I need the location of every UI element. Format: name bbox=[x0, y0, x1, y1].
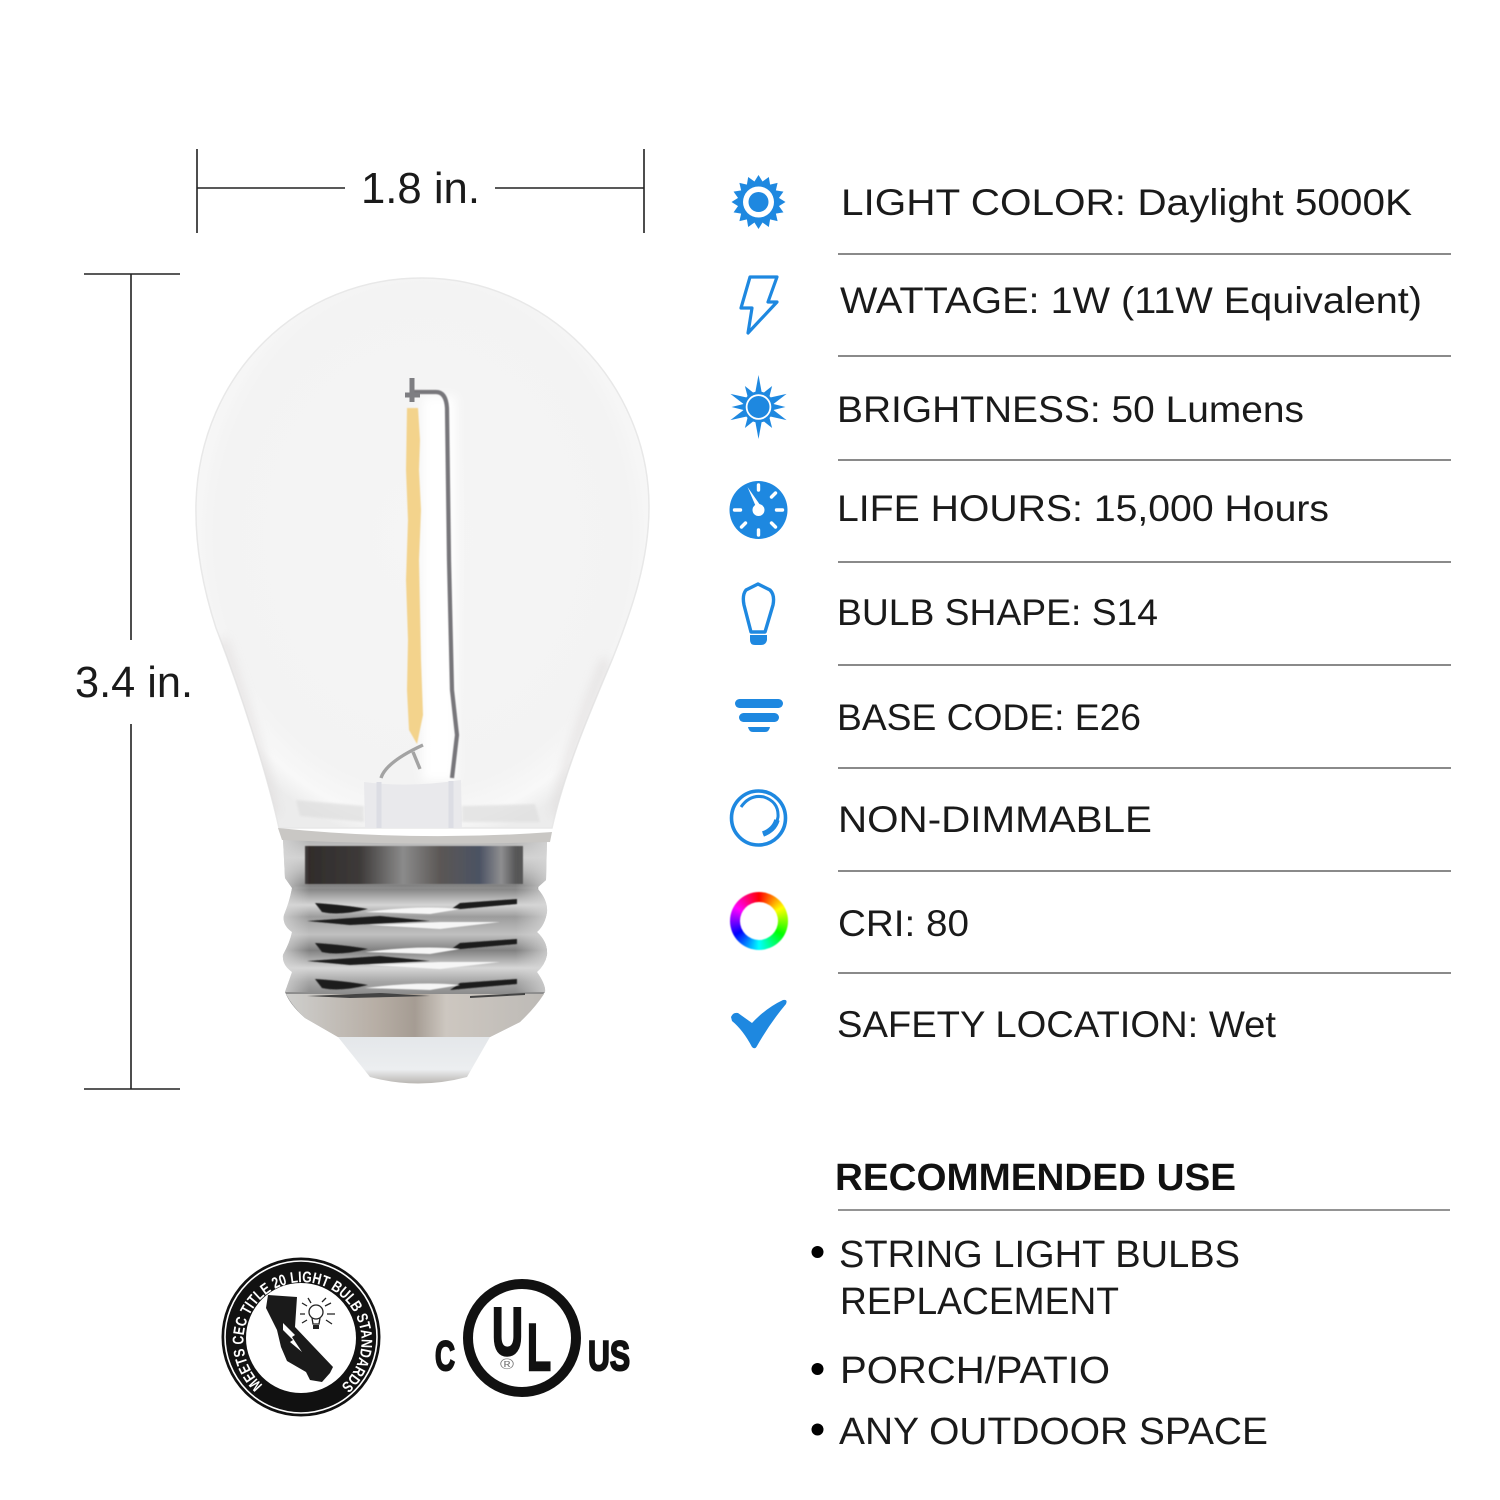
badge: cULus listing mark: L bbox=[527, 1310, 551, 1384]
height dimension: 3.4 in.: 3.4 in. bbox=[75, 658, 193, 707]
icon: safety check mark bbox=[731, 1000, 787, 1048]
heading: recommended use: RECOMMENDED USE bbox=[835, 1157, 1236, 1199]
product photo: clear S14 bulb bbox=[196, 278, 649, 1084]
metal screw base bbox=[283, 840, 547, 1037]
badge: cULus listing mark: US bbox=[588, 1332, 630, 1379]
bullet list: PORCH/PATIO bbox=[840, 1350, 1110, 1392]
badge: cULus listing mark bbox=[435, 1284, 630, 1392]
icon: brightness sun bbox=[729, 375, 788, 439]
light reflection behind filament bbox=[422, 396, 456, 781]
lower shoulder cone bbox=[286, 994, 544, 1037]
bullet list: STRING LIGHT BULBS bbox=[839, 1234, 1240, 1276]
width dimension: 1.8 in. bbox=[197, 149, 644, 233]
bullet list: ANY OUTDOOR SPACE bbox=[839, 1411, 1268, 1453]
recommended use section bbox=[812, 1157, 1450, 1453]
bulb glass bbox=[196, 278, 649, 828]
spec: CRI: CRI: 80 bbox=[838, 903, 969, 944]
icon: CRI color wheel bbox=[730, 892, 788, 950]
badge: cULus listing mark: U bbox=[492, 1294, 523, 1370]
small bulb icon bbox=[300, 1298, 335, 1329]
height dimension: 3.4 in. bbox=[75, 274, 193, 1089]
icon: life hours gauge bbox=[730, 481, 788, 539]
filament support stem bbox=[364, 780, 462, 828]
California silhouette bbox=[266, 1295, 333, 1382]
badge: cULus listing mark: C bbox=[435, 1332, 455, 1379]
ceramic tip contact bbox=[338, 1037, 490, 1084]
filament bbox=[381, 378, 457, 778]
icon: bulb shape bbox=[743, 584, 774, 645]
spec: non-dimmable: NON-DIMMABLE bbox=[838, 799, 1152, 840]
glass collar bbox=[278, 828, 552, 844]
spec: light color: LIGHT COLOR: Daylight 5000K bbox=[841, 182, 1412, 223]
spec: bulb shape: BULB SHAPE: S14 bbox=[837, 592, 1158, 633]
spec: wattage: WATTAGE: 1W (11W Equivalent) bbox=[840, 280, 1422, 321]
spec: life hours: LIFE HOURS: 15,000 Hours bbox=[837, 488, 1329, 529]
spec list bbox=[837, 182, 1451, 1045]
icon: light color sun bbox=[732, 175, 786, 229]
spec: safety location: SAFETY LOCATION: Wet bbox=[837, 1004, 1277, 1045]
icon: non-dimmable ring bbox=[732, 791, 786, 845]
spec: brightness: BRIGHTNESS: 50 Lumens bbox=[837, 389, 1304, 430]
icon: base code bars bbox=[735, 699, 783, 732]
bullet list bbox=[812, 1234, 1268, 1453]
width dimension: 1.8 in.: 1.8 in. bbox=[361, 164, 480, 213]
icon: wattage lightning bolt bbox=[741, 277, 777, 333]
spec icons bbox=[729, 175, 788, 1048]
bullet list: REPLACEMENT bbox=[840, 1281, 1119, 1323]
glass edge shading bbox=[222, 642, 608, 793]
badge: CEC Title 20 seal: MEETS CEC TITLE 20 LIGHT BULB STANDARDS bbox=[232, 1272, 372, 1392]
spec: base code: BASE CODE: E26 bbox=[837, 697, 1141, 738]
badge: cULus listing mark: ® bbox=[500, 1356, 514, 1373]
